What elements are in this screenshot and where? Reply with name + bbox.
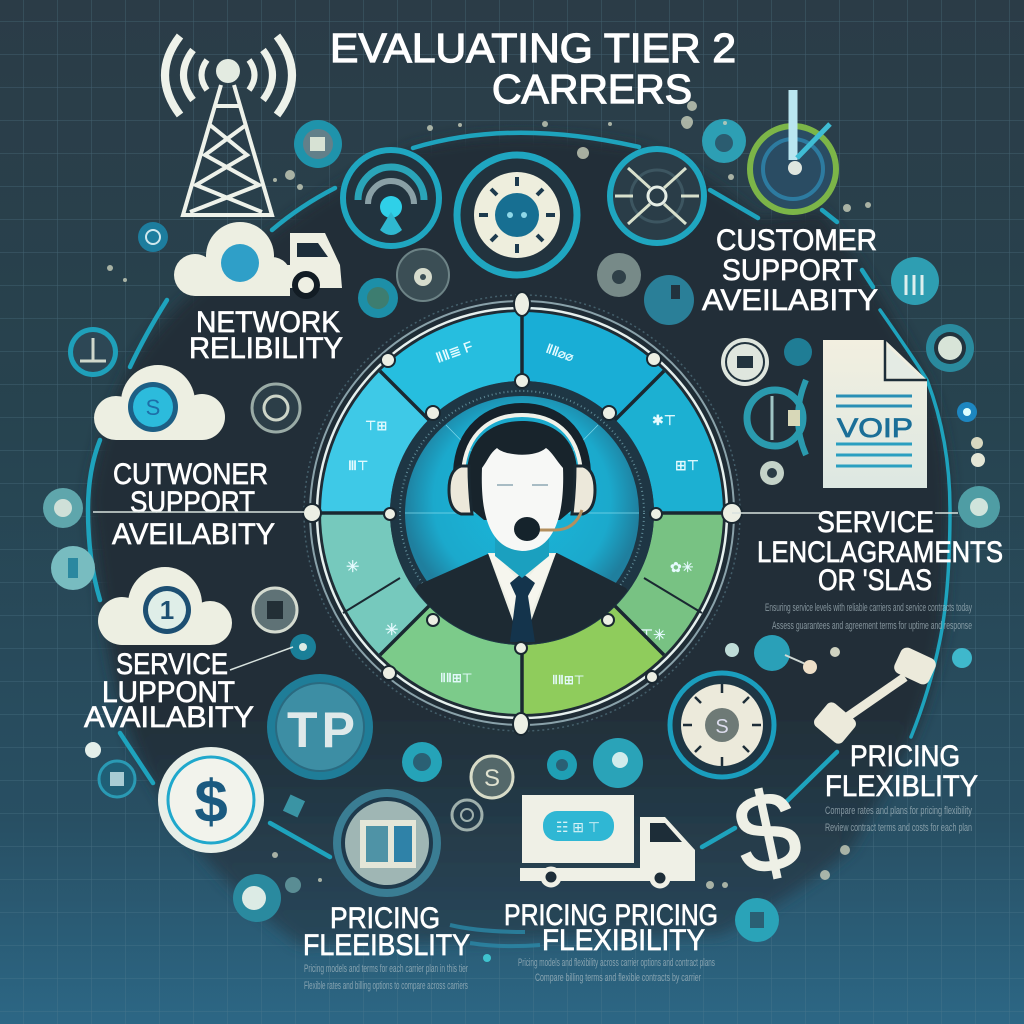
segment glyph labels: Ⅲ⊤ [348, 458, 368, 473]
segment glyph labels: ⅡⅡ⊞⊤ [440, 671, 472, 685]
icon: TP badge: TP [287, 702, 355, 758]
small icon badges: S [484, 765, 500, 792]
label: service support availability: AVAILABITY [84, 701, 254, 734]
label: service level agreements: OR 'SLAS [818, 564, 932, 597]
label: service level agreements [757, 506, 1003, 597]
neck [495, 530, 549, 578]
small icon badges [43, 119, 1000, 962]
label: customer support availability top: SUPPORT [722, 254, 858, 287]
label: pricing flexibility bottom center: PRICING PRICING [504, 899, 718, 932]
outer ring arcs [88, 133, 950, 857]
connector lines [93, 512, 958, 670]
icon: cloud with dollar [94, 365, 225, 440]
segment glyph labels: ✳ [385, 622, 398, 639]
fine print: pricing bottom: Compare billing terms and flexible contracts by carrier [535, 972, 701, 984]
icon: dial badge [457, 155, 577, 275]
suit [416, 553, 628, 644]
icon: delivery truck: ☷ ⊞ ⊤ [556, 819, 600, 835]
segment glyph labels: ✳ [346, 559, 359, 576]
icon: device badge [333, 789, 441, 897]
inner disc [390, 381, 654, 645]
label: service support availability [84, 648, 254, 734]
icon: delivery truck [520, 795, 695, 886]
segment glyph labels: ✿✳ [670, 559, 693, 575]
label: pricing flexibility bottom center: FLEXIBILITY [542, 924, 705, 957]
label: pricing flexibility bottom left: FLEEIBSLITY [303, 929, 470, 962]
segment glyph labels: ⊞⊤ [675, 457, 699, 473]
icon: cloud with number [98, 567, 232, 645]
headset band [458, 408, 586, 472]
title: EVALUATING TIER 2 [330, 25, 736, 71]
label: pricing flexibility bottom left [303, 902, 470, 962]
label: network reliability: RELIBILITY [189, 332, 343, 365]
label: service level agreements: SERVICE [817, 506, 934, 539]
wheel segments [321, 312, 723, 714]
icon: wifi badge [343, 150, 439, 246]
icon: dollar coin: $ [194, 768, 228, 835]
face [482, 448, 563, 551]
title: CARRERS [492, 66, 692, 112]
segment glyph labels: ✱⊤ [652, 412, 676, 428]
label: customer support availability top: AVEILABITY [702, 284, 878, 317]
fine print: pricing bottom: Pricing models and terms for each carrier plan in this tier [304, 963, 468, 975]
label: pricing flexibility right: FLEXIBLITY [825, 770, 978, 803]
fine print: pricing bottom: Pricing models and flexibility across carrier options and contract plans [518, 957, 715, 969]
segment glyph labels: ⊤✳ [640, 627, 666, 644]
wheel nodes [303, 292, 742, 735]
icon: cell tower [165, 36, 292, 215]
label: customer support availability left: AVEILABITY [112, 518, 275, 551]
icon: VOIP document: VOIP [837, 413, 913, 443]
central wheel [304, 295, 740, 731]
icon: cloud with truck [174, 222, 342, 296]
fine print: service [765, 602, 972, 632]
label: network reliability [189, 306, 343, 365]
fine print: pricing right [825, 805, 972, 834]
segment glyph labels: ⅡⅡ⊞⊤ [552, 673, 584, 687]
microphone [535, 510, 582, 530]
title [330, 25, 736, 112]
segment glyph labels: ⅡⅡ≣ F [434, 338, 475, 366]
icon: cloud with dollar: S [146, 395, 160, 420]
label: pricing flexibility right: PRICING [850, 740, 960, 773]
wheel spokes and nodes [321, 312, 723, 714]
label: network reliability: NETWORK [196, 306, 340, 339]
fine print: pricing bottom: Flexible rates and billing options to compare across carriers [304, 980, 468, 992]
wave accents [450, 925, 540, 946]
icon: cloud with number: 1 [160, 595, 174, 625]
label: customer support availability left [112, 458, 275, 551]
label: pricing flexibility bottom left: PRICING [330, 902, 440, 935]
eyes [497, 484, 548, 486]
icon: large dollar sign: $ [724, 765, 811, 900]
head shadow [467, 421, 577, 520]
speckle dots [107, 101, 871, 889]
icon: TP badge [267, 674, 373, 780]
label: customer support availability top [702, 224, 878, 317]
segment glyph labels: ⊤⊞ [365, 418, 387, 433]
icon: gauge with green ring [750, 90, 836, 212]
central agent figure [416, 403, 628, 644]
label: pricing flexibility bottom center [504, 899, 718, 957]
fine print: pricing bottom [304, 957, 715, 992]
icon: clock coin: S [715, 716, 729, 738]
label: customer support availability left: CUTWONER [113, 458, 268, 491]
label: pricing flexibility right [825, 740, 978, 803]
label: service support availability: LUPPONT [102, 676, 235, 709]
icon: VOIP document [823, 340, 927, 488]
segment glyph labels: ⅡⅡ⌀⌀ [544, 341, 576, 365]
label: service support availability: SERVICE [116, 648, 228, 681]
icon: clock coin [670, 673, 774, 777]
tie [510, 573, 535, 642]
segment glyph labels [346, 338, 699, 687]
label: customer support availability left: SUPPORT [130, 486, 255, 519]
icon: telephone handset [812, 645, 938, 746]
icon: dollar coin [158, 747, 264, 853]
icon: crosshair badge [610, 149, 704, 243]
label: customer support availability top: CUSTOMER [716, 224, 877, 257]
ear cups [449, 466, 472, 514]
